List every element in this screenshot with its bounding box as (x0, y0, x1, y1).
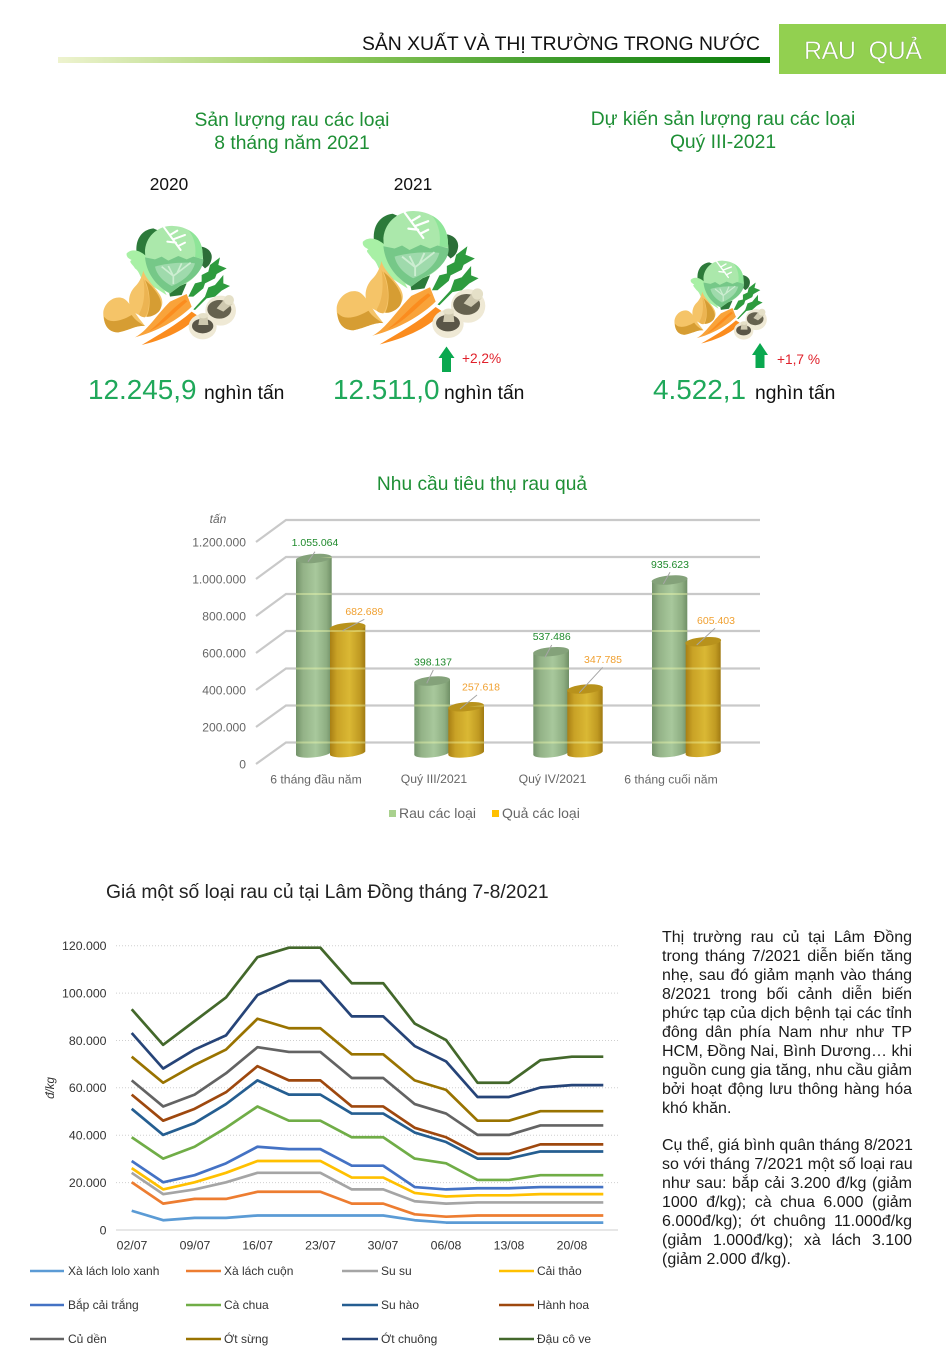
header gradient bar (58, 57, 770, 63)
legend: Su hào (381, 1298, 419, 1312)
data labels: fruit (345, 606, 735, 693)
header title: SẢN XUẤT VÀ THỊ TRƯỜNG TRONG NƯỚC (362, 32, 760, 55)
legend: Đậu cô ve (537, 1332, 591, 1346)
y axis labels: 40.000 (69, 1128, 107, 1142)
category labels: 6 tháng cuối năm (624, 772, 718, 786)
data lines (132, 948, 603, 1223)
text block: price details: 1000 đ/kg); cà chua 6.000 (giảm (662, 1194, 912, 1211)
icon: vegetables 2021 (337, 211, 485, 344)
y axis labels: 0 (100, 1223, 107, 1237)
text block: market overview: bởi hoạt động lưu thông hàng hóa (662, 1081, 912, 1098)
icon: vegetables 2020 (103, 226, 236, 345)
y axis labels: 600.000 (202, 646, 246, 660)
data labels: vegetables: 398.137 (414, 656, 452, 668)
text block: market overview: HCM, Đồng Nai, Bình Dương… khi (662, 1043, 912, 1060)
bars: Q3 (414, 675, 484, 758)
text block: market overview (662, 929, 912, 1117)
x axis labels: 30/07 (368, 1238, 399, 1252)
icon: up arrow Q3 (752, 343, 768, 368)
value 2021: 12.511,0 (333, 374, 440, 405)
text block: price details (662, 1137, 913, 1268)
text block: market overview: khó khăn. (662, 1100, 731, 1117)
legend: Ớt sừng (224, 1331, 268, 1346)
category labels: 6 tháng đầu năm (270, 772, 362, 786)
category labels: Quý IV/2021 (519, 772, 587, 786)
legend: Xà lách lolo xanh (68, 1264, 159, 1278)
text block: market overview: phức tạp của dịch bệnh tại các tỉnh (662, 1005, 912, 1022)
text block: market overview: Thị trường rau củ tại Lâm Đồng (662, 929, 912, 946)
y axis labels: 800.000 (202, 610, 246, 624)
text block: market overview: đông dân phía Nam như như TP (662, 1024, 912, 1041)
data labels: fruit: 347.785 (584, 654, 622, 666)
x axis labels: 20/08 (557, 1238, 588, 1252)
year label 2021: 2021 (394, 174, 432, 194)
value Q3: 4.522,1 (653, 374, 746, 405)
text block: price details: so với tháng 7/2021 một số loại rau (662, 1156, 913, 1173)
y axis labels: 1.200.000 (192, 536, 246, 550)
heading: price chart: Giá một số loại rau củ tại Lâm Đồng tháng 7-8/2021 (106, 882, 549, 903)
data labels: fruit: 257.618 (462, 681, 500, 693)
legend: Hành hoa (537, 1298, 589, 1312)
section tag: rau quả (779, 24, 946, 74)
x axis labels: 02/07 (117, 1238, 148, 1252)
text block: price details: (giảm 2.000 đ/kg). (662, 1251, 791, 1268)
text block: market overview: nguồn cung gia tăng, nhu cầu giảm (662, 1062, 912, 1079)
panel: vegetable output 8 months (88, 110, 524, 405)
data labels: vegetables: 1.055.064 (292, 537, 339, 549)
y axis labels: 60.000 (69, 1081, 107, 1095)
y axis labels: 20.000 (69, 1176, 107, 1190)
value 2020: 12.245,9 (88, 374, 197, 405)
data labels: fruit: 682.689 (345, 606, 383, 618)
value 2021: nghìn tấn (444, 383, 524, 404)
text block: price details: Cụ thể, giá bình quân tháng 8/2021 (662, 1137, 913, 1154)
y axis labels: 200.000 (202, 720, 246, 734)
text block: price details: 6.000đ/kg); ớt chuông 11.000đ/kg (662, 1213, 912, 1230)
bars: Q4 (533, 646, 603, 758)
text block: market overview: nhẹ, sau đó giảm mạnh vào tháng (662, 967, 912, 984)
data labels: vegetables (292, 537, 689, 668)
legend: Bắp cải trắng (68, 1297, 139, 1312)
legend: Cải thảo (537, 1264, 582, 1278)
3D bar chart: demand (192, 512, 760, 821)
data labels: vegetables: 537.486 (533, 631, 571, 643)
x axis labels: 06/08 (431, 1238, 462, 1252)
line chart: prices (30, 939, 618, 1346)
text block: price details: (giảm 1.000đ/kg); xà lách 3.100 (662, 1232, 912, 1249)
text block: market overview: 8/2021 trong bối cảnh diễn biến (662, 986, 912, 1003)
legend: Su su (381, 1264, 412, 1278)
legend: Cà chua (224, 1298, 269, 1312)
icon: vegetables Q3 (674, 261, 767, 344)
change Q3: +1,7 % (777, 352, 820, 367)
category labels (270, 772, 718, 786)
x axis labels: 23/07 (305, 1238, 336, 1252)
x axis labels: 16/07 (242, 1238, 273, 1252)
text block: market overview: trong tháng 7/2021 diễn biến tăng (662, 948, 912, 965)
x axis labels: 09/07 (180, 1238, 211, 1252)
y axis labels: 0 (239, 758, 246, 772)
legend: Rau các loại (399, 805, 476, 821)
legend: Ớt chuông (381, 1331, 437, 1346)
panel: Q3 forecast (591, 109, 855, 405)
heading: output 8 months: 8 tháng năm 2021 (214, 133, 370, 154)
heading: Q3 forecast: Dự kiến sản lượng rau các loại (591, 109, 855, 130)
y axis labels: 80.000 (69, 1034, 107, 1048)
bars: 6 months second half (651, 574, 722, 757)
y axis labels: 120.000 (62, 939, 107, 953)
x axis labels: 13/08 (494, 1238, 525, 1252)
heading: demand chart: Nhu cầu tiêu thụ rau quả (377, 474, 587, 495)
y axis title: đ/kg (45, 1077, 57, 1099)
icon: up arrow 2021 (438, 346, 454, 372)
x axis labels (117, 1238, 588, 1252)
text block: price details: như sau: bắp cải 3.200 đ/kg (giảm (662, 1175, 912, 1192)
legend: Xà lách cuộn (224, 1264, 293, 1278)
change 2021: +2,2% (462, 351, 501, 366)
data labels: fruit: 605.403 (697, 615, 735, 627)
category labels: Quý III/2021 (401, 772, 467, 786)
heading: Q3 forecast: Quý III-2021 (670, 132, 776, 153)
legend (30, 1264, 591, 1346)
data labels: vegetables: 935.623 (651, 559, 689, 571)
value 2020: nghìn tấn (204, 383, 284, 404)
legend: Quả các loại (502, 805, 580, 821)
y axis labels (192, 536, 246, 772)
year label 2020: 2020 (150, 174, 188, 194)
heading: output 8 months: Sản lượng rau các loại (195, 110, 389, 131)
y axis labels: 400.000 (202, 684, 246, 698)
y axis labels: 1.000.000 (192, 572, 246, 586)
y axis labels (62, 939, 107, 1237)
bars: 6 months first half (295, 552, 366, 758)
axis unit: tấn (210, 512, 227, 526)
section tag: rau quả: RAU QUẢ (804, 35, 922, 65)
legend: Củ dền (68, 1332, 107, 1346)
value Q3: nghìn tấn (755, 383, 835, 404)
y axis labels: 100.000 (62, 986, 107, 1000)
legend (389, 805, 580, 821)
